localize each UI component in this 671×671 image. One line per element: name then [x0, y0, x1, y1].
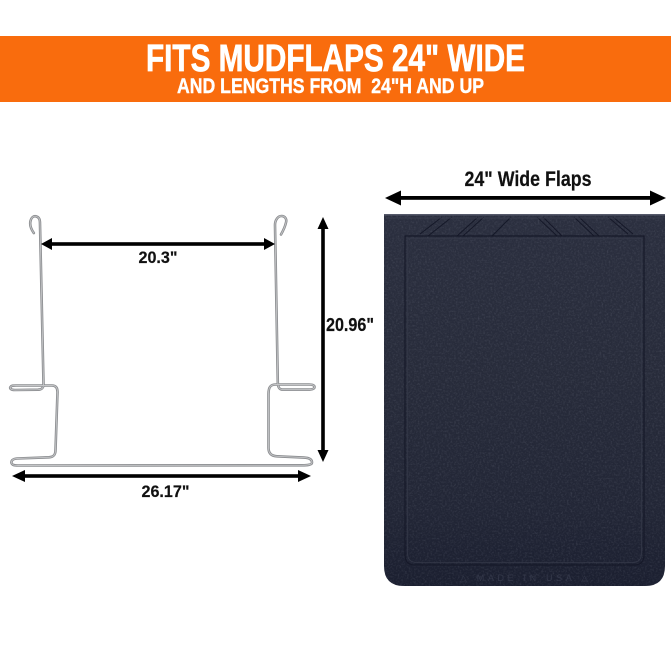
heading: fits mudflaps: FITS MUDFLAPS 24" WIDE: [146, 38, 525, 80]
flap chevrons: [386, 217, 663, 236]
wire hanger bracket: [10, 216, 314, 466]
label: 20.96 inches: 20.96": [326, 315, 374, 335]
label: 24 inch wide flaps: 24" Wide Flaps: [464, 168, 592, 191]
subheading: lengths: AND LENGTHS FROM 24"H AND UP: [177, 75, 484, 98]
label: 26.17 inches: 26.17": [142, 482, 190, 501]
arrow: hanger overall width: [12, 470, 311, 482]
flap inner border: [405, 236, 644, 565]
arrow: hanger height: [318, 217, 328, 462]
mudflap: [384, 214, 665, 586]
label: 20.3 inches: 20.3": [138, 248, 178, 267]
title banner: [0, 36, 671, 102]
arrow: hanger inner width: [41, 238, 275, 250]
flap molded text: △ MADE IN USA △: [460, 573, 588, 583]
arrow: flap width: [385, 190, 666, 206]
